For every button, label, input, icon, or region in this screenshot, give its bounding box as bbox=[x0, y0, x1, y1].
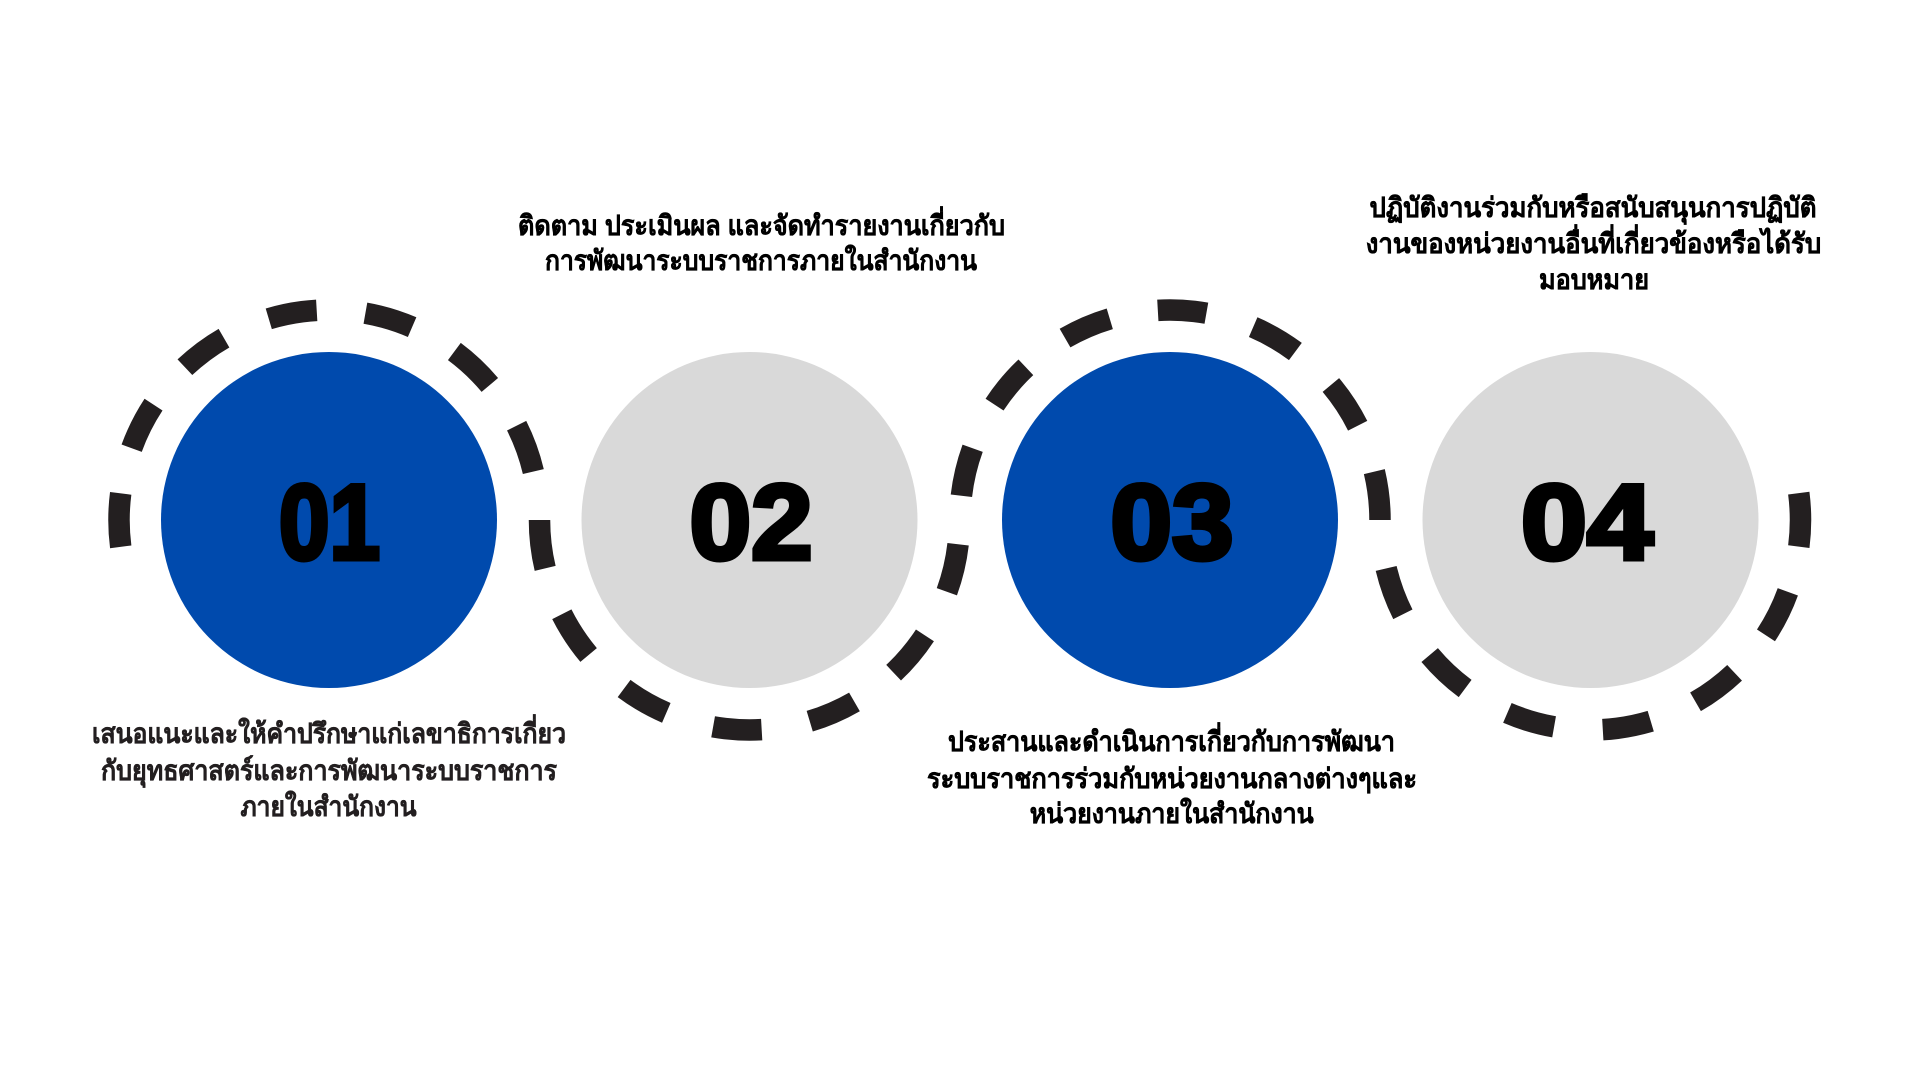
description 04: ปฏิบัติงานร่วมกับหรือสนับสนุนการปฏิบัติ bbox=[1370, 192, 1816, 225]
description 01: เสนอแนะและให้คำปรึกษาแก่เลขาธิการเกี่ยว bbox=[92, 714, 566, 749]
step 03 bbox=[927, 287, 1417, 829]
grey circle 04 bbox=[1422, 352, 1758, 688]
dashed ring 04 bbox=[1356, 285, 1825, 755]
dashed ring 02 bbox=[517, 287, 982, 753]
step 04 bbox=[1356, 192, 1825, 755]
description 03: ประสานและดำเนินการเกี่ยวกับการพัฒนา bbox=[948, 722, 1395, 757]
description 01: ภายในสำนักงาน bbox=[240, 790, 417, 822]
description 04: มอบหมาย bbox=[1539, 264, 1649, 295]
dashed ring 03 bbox=[937, 287, 1403, 753]
number 02: 02 bbox=[690, 462, 813, 582]
description 02: ติดตาม ประเมินผล และจัดทำรายงานเกี่ยวกับ bbox=[518, 206, 1005, 241]
number 03: 03 bbox=[1110, 462, 1234, 582]
grey circle 02 bbox=[582, 352, 918, 688]
step 02 bbox=[517, 206, 1005, 753]
blue circle 01 bbox=[161, 352, 497, 688]
dashed ring 01 bbox=[94, 285, 564, 755]
description 04: งานของหน่วยงานอื่นที่เกี่ยวข้องหรือได้รับ bbox=[1366, 224, 1821, 259]
description 02: การพัฒนาระบบราชการภายในสำนักงาน bbox=[545, 244, 977, 276]
step 01 bbox=[92, 285, 566, 822]
description 03: หน่วยงานภายในสำนักงาน bbox=[1030, 797, 1314, 829]
number 04: 04 bbox=[1521, 462, 1653, 582]
description 01: กับยุทธศาสตร์และการพัฒนาระบบราชการ bbox=[101, 755, 557, 788]
description 03: ระบบราชการร่วมกับหน่วยงานกลางต่างๆและ bbox=[927, 763, 1417, 794]
blue circle 03 bbox=[1002, 352, 1338, 688]
number 01: 01 bbox=[279, 462, 380, 582]
